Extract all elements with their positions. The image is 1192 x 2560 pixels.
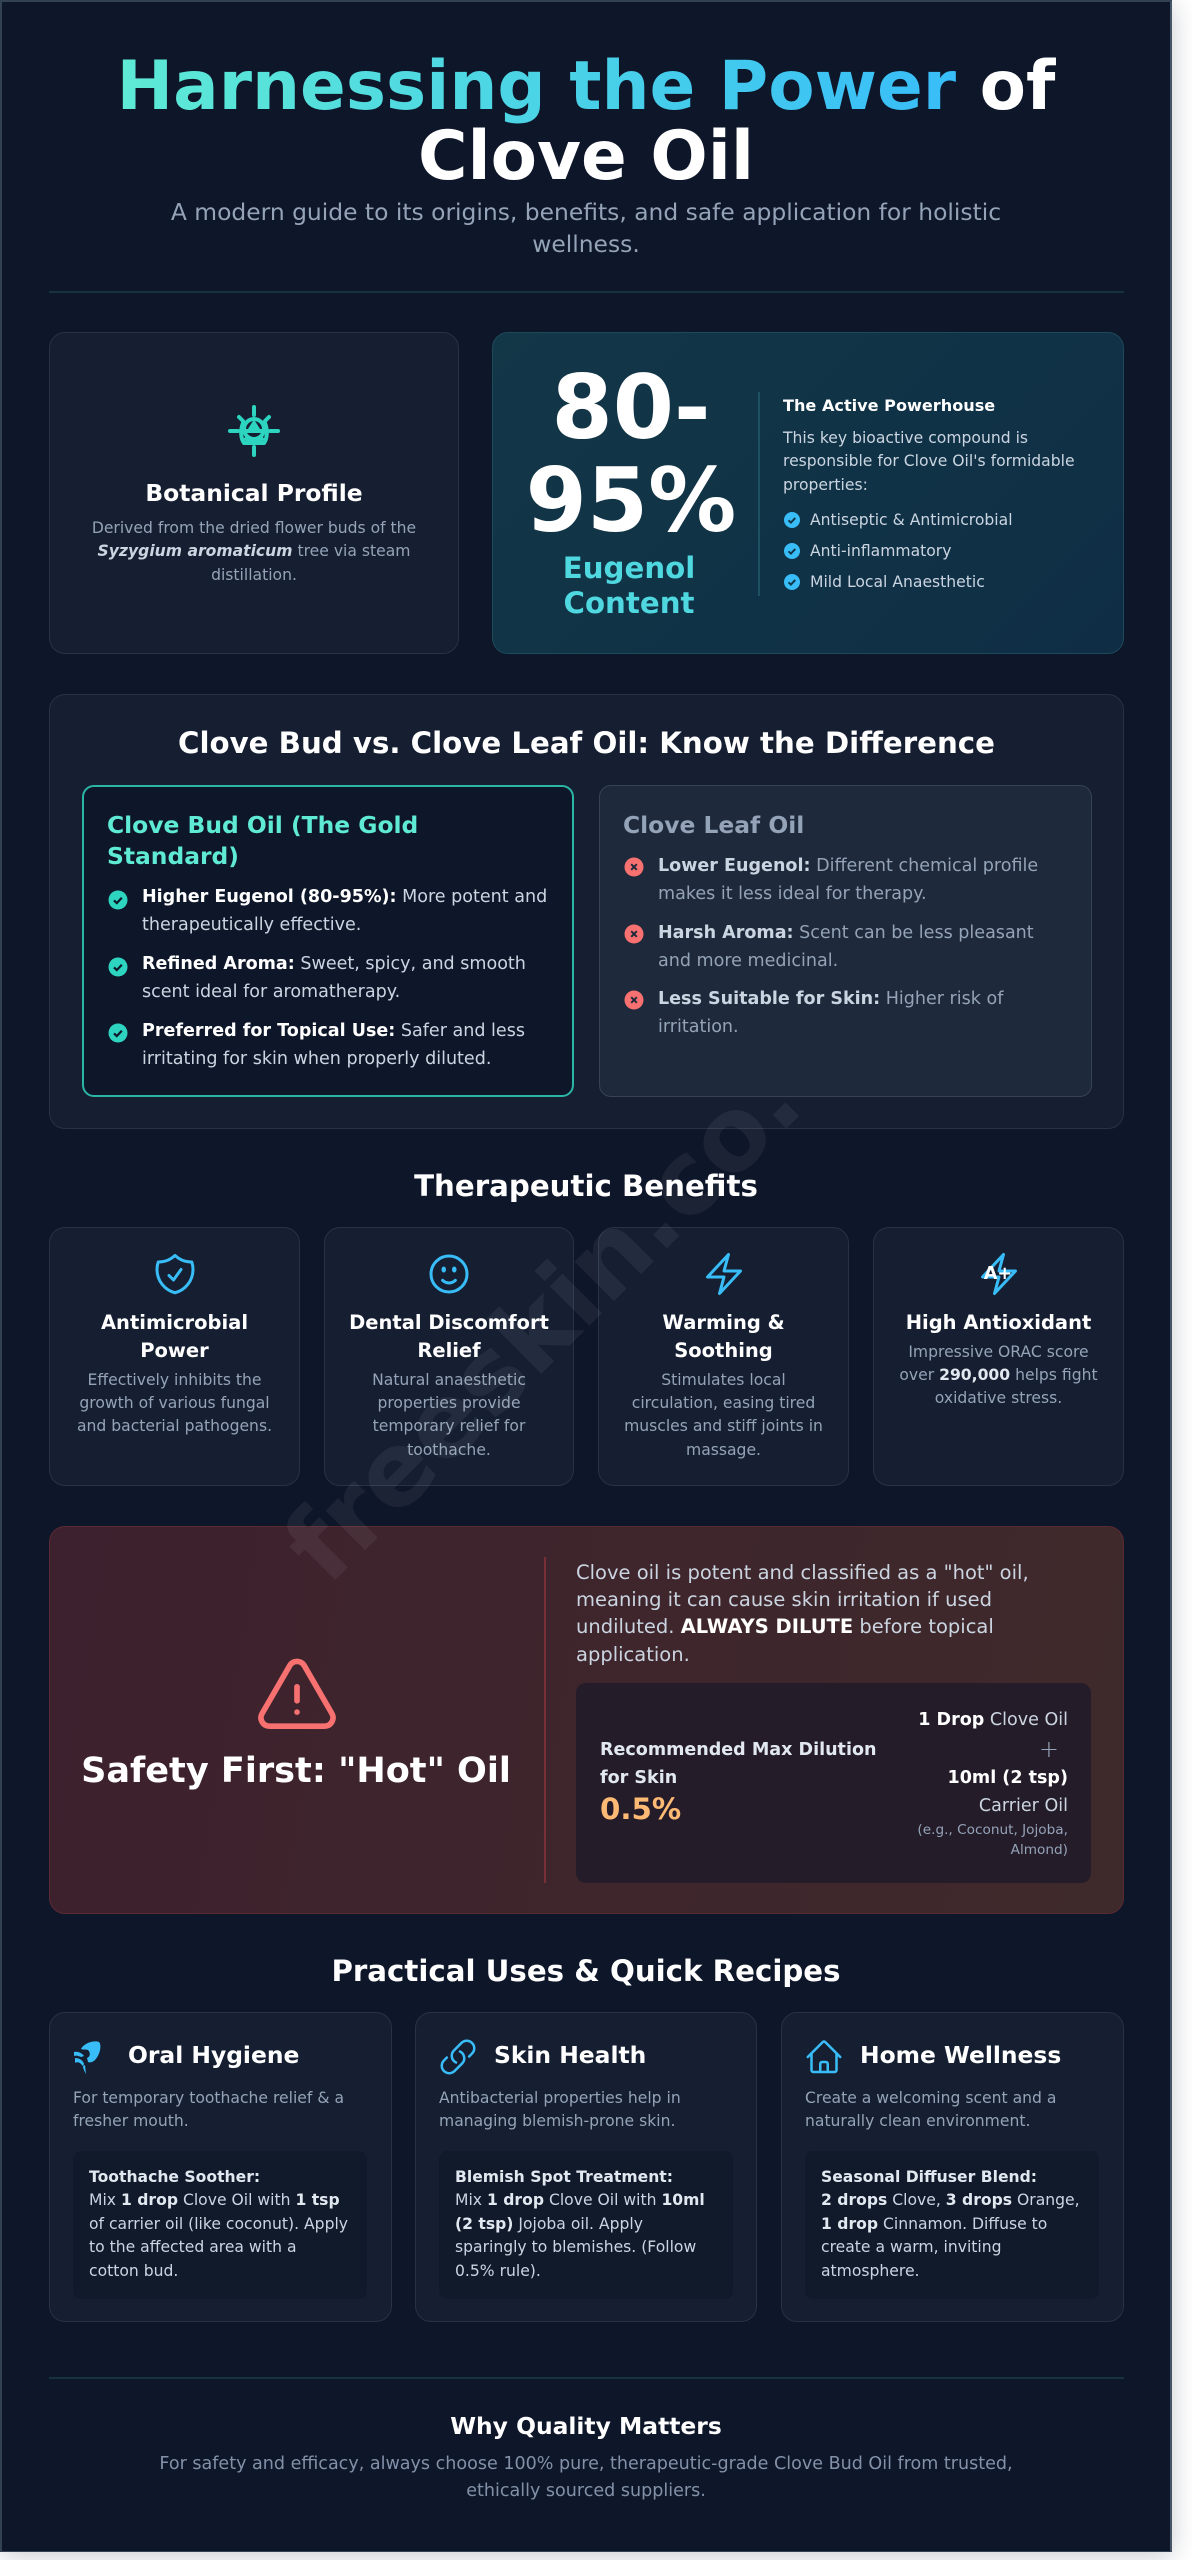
panel: clove bud oil (82, 785, 574, 1097)
panel: eugenol (492, 332, 1124, 654)
text: botanical description: distillation. (211, 566, 297, 584)
icon: warning triangle (258, 1658, 336, 1729)
icon: bolt with grade: A+ (984, 1264, 1012, 1284)
text: botanical description: Syzygium aromaticum tree via steam (98, 542, 410, 560)
title: Clove Oil (418, 116, 754, 195)
subtitle: wellness. (532, 230, 640, 258)
text: oral hygiene description: fresher mouth. (73, 2112, 189, 2130)
heading: botanical profile: Botanical Profile (145, 479, 363, 507)
text: powerhouse description (782, 429, 1075, 494)
recipe: toothache soother: cotton bud. (89, 2262, 178, 2280)
recipe: toothache soother: Mix 1 drop Clove Oil with 1 tsp (89, 2191, 340, 2209)
recipe: seasonal diffuser blend: Seasonal Diffuser Blend: (821, 2168, 1037, 2186)
recipe: toothache soother: Toothache Soother: (89, 2168, 260, 2186)
text: warming: circulation, easing tired (632, 1394, 815, 1412)
card: antimicrobial power (49, 1227, 300, 1486)
recipe: ratio: Almond) (1011, 1842, 1068, 1858)
recipe: blemish spot treatment (439, 2151, 733, 2299)
card: oral hygiene (49, 2012, 392, 2322)
text: warming: massage. (686, 1441, 761, 1459)
label: eugenol content: Content (563, 586, 694, 620)
list: leaf drawbacks: Less Suitable for Skin: Higher risk of (658, 989, 1003, 1009)
card: dental discomfort relief (324, 1227, 574, 1486)
heading: clove bud oil: Clove Bud Oil (The Gold (107, 811, 418, 839)
text: skin health description: Antibacterial properties help in (439, 2089, 681, 2107)
text: warming: muscles and stiff joints in (624, 1417, 823, 1435)
recipe: seasonal diffuser blend: 2 drops Clove, 3 drops Orange, (821, 2191, 1080, 2209)
text: safety warning: undiluted. ALWAYS DILUTE before topical (576, 1615, 994, 1638)
text: antimicrobial: Effectively inhibits the (88, 1370, 262, 1388)
heading: antimicrobial: Power (140, 1338, 209, 1362)
heading: clove bud oil: Standard) (107, 842, 239, 870)
text: recommended dilution: for Skin (600, 1768, 677, 1788)
list: properties: Antiseptic & Antimicrobial (810, 511, 1013, 529)
stat: eugenol percentage (526, 356, 736, 552)
icon: tooth (74, 2041, 100, 2074)
subtitle (171, 198, 1001, 258)
stat: 0.5%: 0.5% (600, 1792, 681, 1826)
icon: shield (156, 1254, 194, 1294)
text: botanical description (92, 519, 416, 584)
recipe: ratio: + (1039, 1735, 1059, 1763)
heading: therapeutic benefits: Therapeutic Benefits (414, 1169, 758, 1203)
recipe: blemish spot treatment: Blemish Spot Treatment: (455, 2168, 673, 2186)
text: home wellness description: naturally clean environment. (805, 2112, 1030, 2130)
heading: safety first: Safety First: "Hot" Oil (81, 1750, 511, 1791)
text: skin health description (439, 2089, 681, 2130)
list: bud benefits: Refined Aroma: Sweet, spicy, and smooth (142, 954, 526, 974)
recipe: blemish spot treatment: (2 tsp) Jojoba oil. Apply (455, 2215, 643, 2233)
heading: comparison: Clove Bud vs. Clove Leaf Oil: Know the Difference (178, 726, 995, 760)
text: dental: temporary relief for (373, 1417, 525, 1435)
text: skin health description: managing blemish-prone skin. (439, 2112, 675, 2130)
title (117, 46, 1056, 195)
recipe: seasonal diffuser blend: atmosphere. (821, 2262, 920, 2280)
heading: warming (662, 1311, 785, 1362)
icon: bolt with grade (981, 1252, 1017, 1296)
title: Harnessing the Power of (117, 46, 1055, 125)
list: leaf drawbacks: makes it less ideal for therapy. (658, 884, 927, 904)
heading: warming: Soothing (674, 1338, 773, 1362)
recipe: ratio: (e.g., Coconut, Jojoba, (917, 1822, 1068, 1838)
recipe: ratio: 1 Drop Clove Oil (918, 1710, 1068, 1730)
heading: clove leaf oil: Clove Leaf Oil (623, 811, 804, 839)
list: properties: Anti-inflammatory (810, 542, 951, 560)
heading: practical uses: Practical Uses & Quick Recipes (331, 1954, 841, 1988)
text: safety warning: Clove oil is potent and classified as a "hot" oil, (576, 1561, 1029, 1584)
stat: eugenol percentage: 80- (552, 356, 710, 459)
heading: antimicrobial: Antimicrobial (101, 1311, 248, 1334)
label: eugenol content (563, 551, 695, 620)
recipe: blemish spot treatment: sparingly to blemishes. (Follow (455, 2238, 696, 2256)
recipe: ratio (917, 1710, 1068, 1858)
list: properties: Mild Local Anaesthetic (810, 573, 985, 591)
panel: clove leaf oil (599, 785, 1092, 1097)
heading: dental (349, 1311, 549, 1362)
text: oral hygiene description (73, 2089, 344, 2130)
panel: dilution ratio (576, 1683, 1091, 1883)
text: dental (372, 1370, 526, 1459)
list: bud benefits: therapeutically effective. (142, 915, 361, 935)
heading: antimicrobial (101, 1311, 248, 1362)
recipe: seasonal diffuser blend: 1 drop Cinnamon. Diffuse to (821, 2215, 1047, 2233)
watermark: freeskin.co. (261, 1042, 824, 1605)
panel: safety first (49, 1526, 1124, 1914)
list: leaf drawbacks: Harsh Aroma: Scent can be less pleasant (658, 922, 1034, 942)
heading: home wellness: Home Wellness (860, 2041, 1061, 2069)
text: warming (624, 1370, 823, 1459)
recipe: ratio: 10ml (2 tsp) (948, 1768, 1068, 1788)
list: leaf drawbacks: irritation. (658, 1017, 739, 1037)
recipe: seasonal diffuser blend: create a warm, inviting (821, 2238, 1002, 2256)
heading: dental: Dental Discomfort (349, 1311, 549, 1334)
list: leaf drawbacks: Lower Eugenol: Different chemical profile (658, 856, 1038, 876)
card: skin health (415, 2012, 757, 2322)
list: properties (784, 511, 1013, 591)
recipe: blemish spot treatment: 0.5% rule). (455, 2262, 541, 2280)
label: eugenol content: Eugenol (563, 551, 695, 585)
icon: botanical (228, 405, 280, 457)
card: home wellness (781, 2012, 1124, 2322)
recipe: seasonal diffuser blend (805, 2151, 1099, 2299)
recipe: toothache soother: to the affected area with a (89, 2238, 297, 2256)
list: leaf drawbacks (624, 856, 1038, 1037)
heading: dental: Relief (417, 1338, 481, 1362)
text: botanical description: Derived from the dried flower buds of the (92, 519, 416, 537)
text: powerhouse description: This key bioactive compound is (783, 429, 1028, 447)
text: warming: Stimulates local (661, 1370, 786, 1388)
text: recommended dilution (600, 1740, 876, 1788)
recipe: ratio: Carrier Oil (979, 1796, 1068, 1816)
text: home wellness description (805, 2089, 1056, 2130)
text: antioxidant: oxidative stress. (935, 1389, 1062, 1407)
icon: house (806, 2040, 842, 2074)
text: dental: properties provide (377, 1394, 521, 1412)
text: safety warning: application. (576, 1643, 690, 1666)
card: warming and soothing (598, 1227, 849, 1486)
panel: botanical profile (49, 332, 459, 654)
text: powerhouse description: responsible for Clove Oil's formidable (783, 452, 1075, 470)
heading: why quality matters: Why Quality Matters (450, 2412, 722, 2440)
text: antimicrobial: and bacterial pathogens. (77, 1417, 272, 1435)
text: antioxidant (899, 1342, 1098, 1407)
heading: the active powerhouse: The Active Powerhouse (783, 396, 995, 415)
subtitle: A modern guide to its origins, benefits, and safe application for holistic (171, 198, 1001, 226)
text: oral hygiene description: For temporary toothache relief & a (73, 2089, 344, 2107)
text: antimicrobial: growth of various fungal (79, 1394, 270, 1412)
panel: bud vs leaf comparison (49, 694, 1124, 1129)
card: high antioxidant (873, 1227, 1124, 1486)
icon: smile (430, 1254, 468, 1294)
list: bud benefits: Higher Eugenol (80-95%): More potent and (142, 887, 547, 907)
heading: oral hygiene: Oral Hygiene (128, 2041, 299, 2069)
heading: skin health: Skin Health (494, 2041, 646, 2069)
text: antimicrobial (77, 1370, 272, 1435)
list: bud benefits: Preferred for Topical Use: Safer and less (142, 1021, 525, 1041)
recipe: toothache soother: of carrier oil (like coconut). Apply (89, 2215, 348, 2233)
text: dental: Natural anaesthetic (372, 1370, 526, 1388)
list: bud benefits (108, 887, 547, 1069)
list: bud benefits: scent ideal for aromatherapy. (142, 982, 400, 1002)
text: antioxidant: Impressive ORAC score (908, 1342, 1089, 1360)
stat: eugenol percentage: 95% (526, 449, 736, 552)
text: home wellness description: Create a welcoming scent and a (805, 2089, 1056, 2107)
heading: clove bud oil (107, 811, 418, 870)
icon: bolt (706, 1252, 742, 1296)
text: safety warning: meaning it can cause skin irritation if used (576, 1588, 992, 1611)
icon: link (440, 2040, 476, 2074)
heading: antioxidant: High Antioxidant (906, 1311, 1091, 1334)
list: leaf drawbacks: and more medicinal. (658, 950, 838, 970)
text: safety warning (576, 1561, 1029, 1666)
text: antioxidant: over 290,000 helps fight (899, 1366, 1098, 1384)
recipe: blemish spot treatment: Mix 1 drop Clove Oil with 10ml (455, 2191, 705, 2209)
text: quality note (159, 2454, 1013, 2500)
text: dental: toothache. (407, 1441, 491, 1459)
text: recommended dilution: Recommended Max Dilution (600, 1740, 876, 1760)
recipe: toothache soother (73, 2151, 367, 2299)
list: bud benefits: irritating for skin when properly diluted. (142, 1049, 491, 1069)
text: powerhouse description: properties: (783, 476, 868, 494)
text: quality note: For safety and efficacy, always choose 100% pure, therapeutic-grade Clove Bud Oil from trusted, (159, 2454, 1013, 2474)
heading: warming: Warming & (662, 1311, 785, 1334)
text: quality note: ethically sourced suppliers. (466, 2480, 706, 2500)
